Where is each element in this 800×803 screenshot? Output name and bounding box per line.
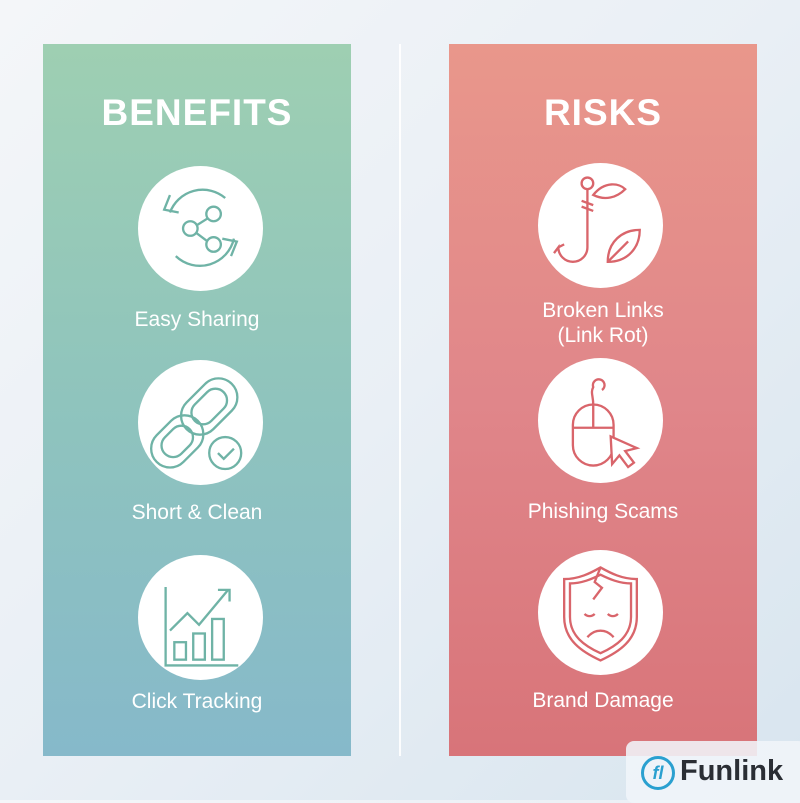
icon: mouse cursor <box>538 358 663 483</box>
label: broken links <box>542 299 664 347</box>
icon: fl logo <box>641 756 675 790</box>
logo: funlink <box>626 741 800 803</box>
icon: hook with leaves <box>538 163 663 288</box>
label: brand damage: Brand Damage <box>532 689 674 712</box>
label: easy sharing: Easy Sharing <box>135 308 259 331</box>
icon: chain link <box>138 360 263 485</box>
icon: sharing <box>138 166 263 291</box>
panel: risks <box>449 44 757 756</box>
label: phishing scams: Phishing Scams <box>528 500 678 523</box>
icon: broken shield <box>538 550 663 675</box>
label: click tracking: Click Tracking <box>132 690 262 713</box>
panel: benefits <box>43 44 351 756</box>
text: funlink: Funlink <box>680 755 783 787</box>
label: broken links: (Link Rot) <box>557 324 649 347</box>
icon: chart <box>138 555 263 680</box>
label: short & clean: Short & Clean <box>132 501 262 524</box>
heading: benefits: BENEFITS <box>102 92 292 133</box>
icon: fl logo: fl <box>652 763 664 783</box>
heading: risks: RISKS <box>544 92 662 133</box>
label: broken links: Broken Links <box>542 299 664 322</box>
